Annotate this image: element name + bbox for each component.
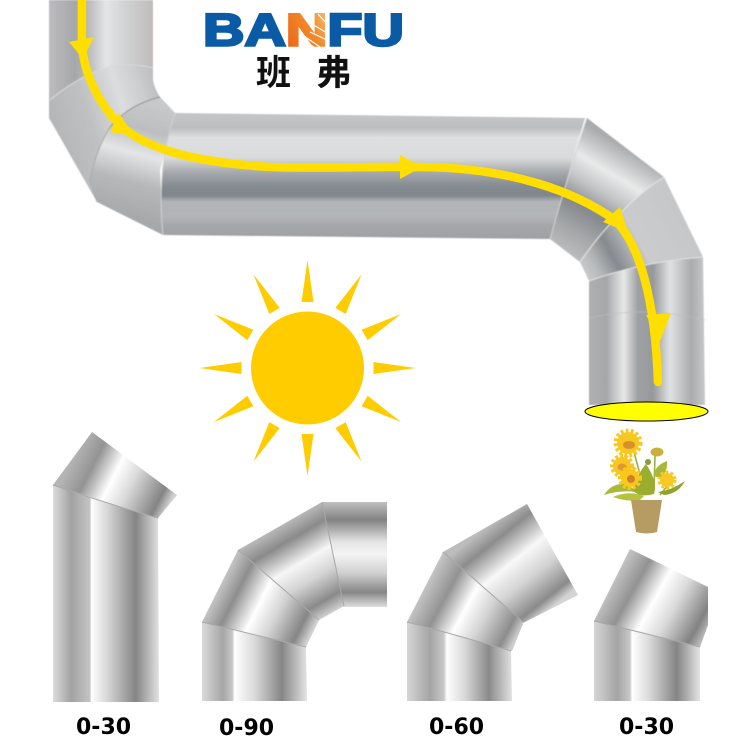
label 0-30: 0-30: [76, 715, 131, 740]
duct segment: horizontal run: [161, 113, 585, 239]
duct segment: right bend lower: [580, 177, 703, 281]
logo chinese name second character: 弗: [316, 54, 351, 93]
duct segment: right bend upper: [550, 118, 664, 262]
panel: elbow 0-90: [202, 502, 387, 741]
logo: BANFU: [203, 4, 404, 93]
duct segment: vertical outlet: [589, 257, 705, 405]
elbow upper section: [594, 549, 708, 647]
elbow second section: [202, 550, 319, 647]
elbow third section: [238, 502, 344, 620]
seams: [202, 502, 344, 647]
logo wordmark: BA NFU: [203, 4, 404, 56]
yellow airflow arrow: [69, 0, 671, 382]
elbow straight section: [53, 485, 159, 702]
duct segment: upper left bend: [49, 65, 175, 202]
label 0-90: 0-90: [219, 716, 274, 741]
elbow upper section: [443, 504, 578, 623]
label 0-60: 0-60: [429, 715, 484, 740]
seam: [53, 485, 158, 518]
duct segment: top vertical: [49, 0, 153, 108]
elbow bottom section: [407, 622, 512, 701]
insulated duct with bends: [49, 0, 705, 405]
label 0-30: 0-30: [619, 715, 674, 740]
seam: [594, 621, 700, 647]
elbow upper section: [53, 432, 177, 518]
icon: sun: [200, 260, 416, 476]
icon: potted sunflower: [604, 432, 685, 534]
seams: [407, 552, 521, 651]
sunflower blossoms: [613, 432, 674, 487]
elbow second section: [407, 552, 523, 651]
duct seams: [50, 65, 705, 320]
outlet opening: yellow ellipse: [585, 402, 708, 421]
duct segment: lower left bend: [90, 97, 175, 235]
panel: elbow 0-30 short: [594, 549, 708, 740]
elbow bottom section: [202, 622, 307, 701]
elbow horizontal section: [322, 502, 387, 607]
plant leaves and stems: [604, 452, 685, 501]
logo chinese name: 班: [256, 54, 291, 93]
elbow bottom section: [594, 621, 700, 701]
logo N sunburst rays: [302, 14, 327, 47]
panel: elbow 0-30 long: [53, 432, 177, 740]
flower pot: [631, 500, 662, 534]
panel: elbow 0-60: [407, 504, 578, 740]
